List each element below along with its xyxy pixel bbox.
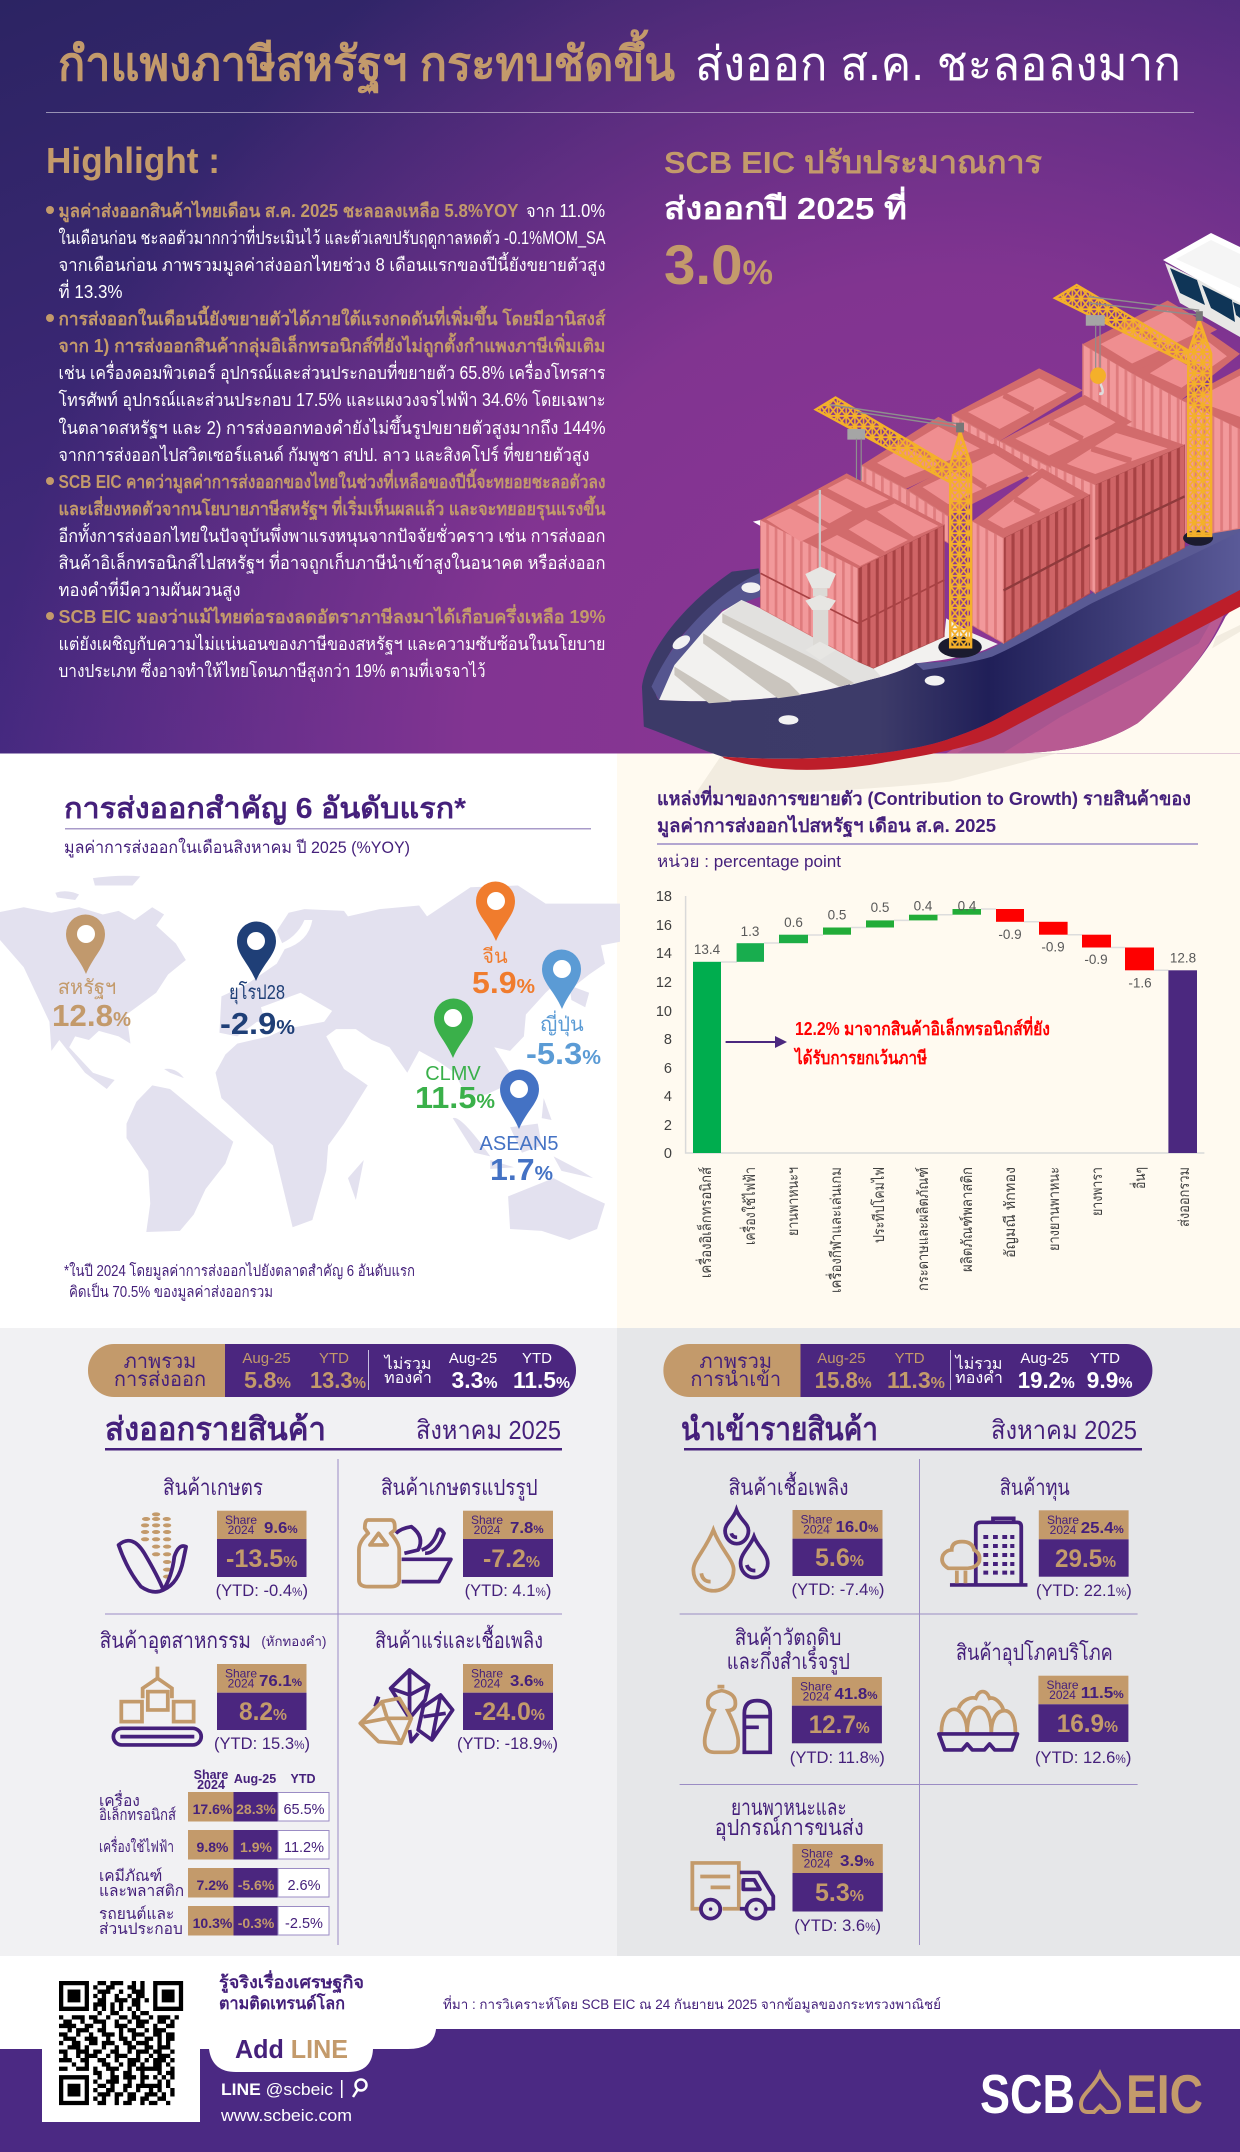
value labels: 0.5	[828, 908, 846, 922]
value labels: 0.6	[784, 915, 803, 930]
icon: truck	[692, 1863, 773, 1919]
export summary pill: 13.3%	[310, 1367, 366, 1393]
pin: China	[472, 882, 535, 1000]
bullet 3: SCB EIC คาดว่ามูลค่าการส่งออกของไทยในช่วงที่เหลือของปีนี้จะทยอยชะลอตัวลง	[58, 468, 606, 494]
row: chemicals: เคมีภัณฑ์	[99, 1867, 162, 1885]
import heading: สิงหาคม 2025	[991, 1415, 1137, 1445]
bullet 2: จากการส่งออกไปสวิตเซอร์แลนด์ กัมพูชา สปป. ลาว และสิงคโปร์ ที่ขยายตัวสูง	[58, 442, 590, 466]
back crane	[1055, 285, 1213, 546]
cell: raw materials: สินค้าวัตถุดิบ	[735, 1625, 841, 1651]
cream corner below hull	[1023, 600, 1240, 753]
arrow	[726, 1036, 787, 1048]
ytd: (YTD: -18.9%)	[457, 1734, 558, 1753]
share box: 76.1%	[259, 1673, 302, 1690]
value labels: 13.4	[694, 942, 721, 957]
SCB EIC logo: EIC	[1126, 2063, 1203, 2125]
industrial breakdown table: 2024	[197, 1778, 225, 1792]
signal mast	[805, 490, 836, 660]
bullet 3: ทองคำที่มีความผันผวนสูง	[58, 577, 240, 601]
pin: CLMV	[415, 998, 495, 1115]
category labels: เครื่องกีฬาและเล่นเกม	[825, 1167, 845, 1293]
share box: 7.8%	[510, 1520, 544, 1537]
y axis labels	[656, 889, 672, 1162]
share box: 2024	[1049, 1688, 1076, 1702]
pin: China: จีน	[482, 946, 508, 968]
import summary pill: YTD	[895, 1350, 925, 1367]
share box: Share	[225, 1666, 257, 1680]
LINE promo: Add LINE	[235, 2034, 348, 2064]
y axis labels: 10	[656, 1004, 672, 1020]
row: electronics	[99, 1790, 329, 1824]
cell: industrial: สินค้าอุตสาหกรรม	[100, 1628, 251, 1654]
bullet 1	[46, 200, 606, 302]
value labels: -1.6	[1128, 976, 1152, 990]
bullet 1: จากเดือนก่อน ภาพรวมมูลค่าส่งออกไทยช่วง 8 เดือนแรกของปีนี้ยังขยายตัวสูง	[58, 252, 606, 276]
bullet 1: ที่ 13.3%	[58, 279, 122, 302]
row: appliances: 9.8%	[197, 1839, 229, 1855]
bow inner side	[651, 573, 761, 700]
row: chemicals: 7.2%	[197, 1877, 229, 1893]
bullet 2: โทรศัพท์ อุปกรณ์และส่วนประกอบ 17.5% และแผงวงจรไฟฟ้า 34.6% โดยเฉพาะ	[58, 389, 606, 411]
world map	[0, 876, 620, 1240]
y axis labels: 12	[656, 975, 672, 991]
bars	[693, 909, 1197, 1153]
export summary pill: 3.3%	[452, 1367, 498, 1393]
cell: fuel imports: สินค้าเชื้อเพลิง	[728, 1472, 848, 1500]
title	[58, 29, 1181, 95]
industrial breakdown table: YTD	[290, 1772, 316, 1786]
y axis labels: 8	[664, 1032, 672, 1048]
share box: Share	[1047, 1513, 1079, 1527]
value labels: 0.4	[958, 898, 977, 914]
import summary pill	[663, 1344, 1152, 1397]
value labels: -0.9	[1041, 940, 1065, 954]
cell: capital goods: สินค้าทุน	[1000, 1475, 1070, 1501]
share box: -24.0%	[474, 1698, 545, 1726]
import heading: นำเข้ารายสินค้า	[681, 1411, 878, 1447]
value labels: -0.9	[1084, 952, 1108, 967]
export heading: ส่งออกรายสินค้า	[105, 1411, 326, 1447]
export summary pill: 11.5%	[513, 1367, 570, 1393]
hero background	[0, 0, 1240, 754]
hull reflection	[946, 607, 1227, 753]
icon: egg tray	[939, 1692, 1017, 1750]
LINE promo: รู้จริงเรื่องเศรษฐกิจ	[219, 1970, 364, 1994]
bullet 2: ในตลาดสหรัฐฯ และ 2) การส่งออกทองคำยังไม่ขึ้นรูปขยายตัวสูงมากถึง 144%	[58, 415, 606, 439]
bullet 3: สินค้าอิเล็กทรอนิกส์ไปสหรัฐฯ ที่อาจถูกเก็บภาษีนำเข้าสูงในอนาคต หรือส่งออก	[58, 550, 606, 574]
y axis labels: 14	[656, 946, 672, 962]
export summary pill: ภาพรวม	[124, 1351, 196, 1373]
footnote	[64, 1262, 415, 1302]
icon: shakers	[705, 1687, 770, 1752]
share box	[792, 1510, 882, 1576]
icon: building and tree	[942, 1518, 1027, 1585]
share box: Share	[471, 1666, 503, 1680]
category labels: ยานพาหนะฯ	[785, 1167, 802, 1236]
share box: 29.5%	[1055, 1545, 1116, 1573]
pin: USA	[52, 915, 131, 1033]
share box: 2024	[474, 1676, 501, 1690]
ytd: (YTD: 11.8%)	[790, 1748, 885, 1767]
panel backgrounds: export and import	[0, 1328, 1240, 1956]
share box: 8.2%	[239, 1698, 287, 1726]
bullet 4: SCB EIC มองว่าแม้ไทยต่อรองลดอัตราภาษีลงมาได้เกือบครึ่งเหลือ 19%	[58, 604, 606, 627]
icon: bottle and fruit bowl	[359, 1520, 451, 1587]
share box: 2024	[228, 1676, 255, 1690]
forecast callout: ส่งออกปี 2025 ที่	[664, 186, 907, 226]
pin: EU	[220, 922, 295, 1041]
row: electronics: 65.5%	[283, 1802, 325, 1818]
pin: China: 5.9%	[472, 965, 535, 1000]
chart callout	[793, 1016, 1050, 1068]
export summary pill: YTD	[522, 1350, 552, 1367]
highlight text block	[46, 200, 606, 682]
chart callout: ได้รับการยกเว้นภาษี	[793, 1047, 927, 1068]
row: electronics: อิเล็กทรอนิกส์	[99, 1805, 176, 1824]
share box: 41.8%	[834, 1686, 878, 1703]
share box: 2024	[1050, 1523, 1077, 1537]
y axis labels: 16	[656, 918, 672, 934]
share box: Share	[801, 1846, 833, 1860]
hull	[642, 520, 1240, 759]
pin: Japan: -5.3%	[526, 1036, 601, 1071]
row: chemicals: และพลาสติก	[99, 1883, 184, 1900]
bullet 1: ในเดือนก่อน ชะลอตัวมากกว่าที่ประเมินไว้ และตัวเลขปรับฤดูกาลหดตัว -0.1%MOM_SA	[58, 225, 606, 249]
value labels: 1.3	[741, 924, 759, 939]
category labels	[695, 1167, 1193, 1293]
row: autos: -2.5%	[285, 1916, 323, 1932]
footnote: คิดเป็น 70.5% ของมูลค่าส่งออกรวม	[69, 1282, 273, 1302]
category labels: เครื่องใช้ไฟฟ้า	[739, 1167, 759, 1245]
cell: vehicles: อุปกรณ์การขนส่ง	[715, 1815, 864, 1841]
share box: 5.6%	[815, 1544, 864, 1572]
panel backgrounds: map and chart	[0, 754, 1240, 1328]
import summary pill: 19.2%	[1018, 1367, 1075, 1393]
cell: consumer goods	[939, 1640, 1131, 1767]
share box	[792, 1844, 883, 1912]
bullet 3: และเสี่ยงหดตัวจากนโยบายภาษีสหรัฐฯ ที่เริ่มเห็นผลแล้ว และจะทยอยรุนแรงขึ้น	[58, 495, 606, 521]
share box: 2024	[474, 1523, 501, 1537]
share box: Share	[1046, 1678, 1079, 1692]
import summary pill: การนำเข้า	[690, 1369, 781, 1391]
front crane	[816, 397, 982, 658]
cell: agriculture	[119, 1475, 308, 1600]
share box: 2024	[803, 1690, 830, 1704]
import summary pill: 15.8%	[815, 1367, 872, 1393]
bullet 1: จาก 11.0%	[526, 201, 605, 221]
share box: 3.6%	[510, 1673, 544, 1690]
value labels: -0.9	[998, 927, 1022, 942]
ytd: (YTD: 15.3%)	[214, 1734, 310, 1753]
cell: capital goods	[942, 1475, 1132, 1600]
pin: CLMV: CLMV	[425, 1063, 481, 1085]
pin: USA: 12.8%	[52, 998, 131, 1033]
bullet 3	[46, 468, 606, 601]
icon: drops	[693, 1510, 768, 1591]
row: electronics: 28.3%	[236, 1801, 276, 1817]
pin: EU: -2.9%	[220, 1006, 295, 1041]
value labels: 0.4	[914, 898, 933, 914]
icon: corn	[119, 1512, 186, 1592]
icon: conveyor	[113, 1667, 201, 1745]
hull shadow on cream	[694, 753, 1057, 797]
value labels: 0.5	[871, 900, 889, 915]
containers: front stack	[753, 473, 944, 668]
title: ส่งออก ส.ค. ชะลอลงมาก	[695, 37, 1181, 90]
row: appliances: 11.2%	[284, 1840, 324, 1856]
title: กำแพงภาษีสหรัฐฯ กระทบชัดขึ้น	[58, 29, 675, 95]
export heading: สิงหาคม 2025	[416, 1415, 561, 1445]
bullet 2: การส่งออกในเดือนนี้ยังขยายตัวได้ภายใต้แรงกดดันที่เพิ่มขึ้น โดยมีอานิสงส์	[58, 305, 606, 329]
share box: 16.0%	[836, 1519, 879, 1536]
LINE promo: LINE @scbeic	[221, 2080, 334, 2099]
share box: 2024	[804, 1856, 831, 1870]
category labels: เครื่องอิเล็กทรอนิกส์	[695, 1167, 715, 1278]
share box	[463, 1511, 553, 1577]
category labels: ส่งออกรวม	[1176, 1167, 1193, 1227]
row: autos: 10.3%	[193, 1915, 233, 1931]
SCB EIC logo	[980, 2063, 1203, 2125]
export summary pill: Aug-25	[449, 1350, 497, 1367]
bullet 1: มูลค่าส่งออกสินค้าไทยเดือน ส.ค. 2025 ชะลอลงเหลือ 5.8%YOY	[58, 200, 518, 223]
ytd: (YTD: -0.4%)	[216, 1581, 308, 1600]
import summary pill: Aug-25	[1020, 1350, 1069, 1367]
row: chemicals: 2.6%	[287, 1878, 321, 1894]
row: electronics: 17.6%	[193, 1801, 233, 1817]
cell: consumer goods: สินค้าอุปโภคบริโภค	[956, 1640, 1113, 1666]
share box: 5.3%	[815, 1879, 864, 1907]
icon: crystals	[360, 1670, 453, 1743]
pin: ASEAN5: ASEAN5	[480, 1133, 558, 1155]
cell: agriculture: สินค้าเกษตร	[163, 1475, 263, 1500]
share box: -13.5%	[226, 1545, 298, 1573]
import heading	[681, 1411, 1142, 1450]
cell: minerals and fuel: สินค้าแร่และเชื้อเพลิง	[375, 1625, 543, 1653]
forecast callout: SCB EIC ปรับประมาณการ	[664, 145, 1042, 180]
y axis labels: 6	[664, 1061, 672, 1077]
pin: ASEAN5: 1.7%	[490, 1152, 553, 1187]
import summary pill: YTD	[1090, 1350, 1120, 1367]
share box	[463, 1664, 553, 1730]
forecast callout	[664, 145, 1042, 296]
cell: industrial	[100, 1628, 326, 1753]
import summary pill: ทองคำ	[955, 1370, 1003, 1387]
ytd: (YTD: 3.6%)	[794, 1916, 881, 1935]
LINE promo	[219, 1970, 366, 2125]
bullet 2: จาก 1) การส่งออกสินค้ากลุ่มอิเล็กทรอนิกส์ที่ยังไม่ถูกตั้งกำแพงภาษีเพิ่มเติม	[58, 332, 606, 358]
bullet 2	[46, 305, 606, 466]
export heading	[105, 1411, 562, 1450]
row: autos: ส่วนประกอบ	[99, 1921, 183, 1938]
category labels: ประทีปโคมไฟ	[870, 1167, 888, 1243]
export summary pill: Aug-25	[242, 1350, 291, 1367]
category labels: ผลิตภัณฑ์พลาสติก	[959, 1167, 976, 1272]
export summary pill: การส่งออก	[114, 1369, 206, 1391]
row: appliances	[99, 1830, 329, 1860]
ytd: (YTD: 12.6%)	[1035, 1748, 1131, 1767]
share box: 9.6%	[264, 1520, 298, 1537]
share box: 25.4%	[1081, 1520, 1124, 1537]
row: appliances: เครื่องใช้ไฟฟ้า	[99, 1836, 174, 1856]
import summary pill: ไม่รวม	[954, 1354, 1002, 1373]
share box	[1039, 1510, 1129, 1577]
highlight heading: Highlight :	[46, 140, 220, 181]
chart heading: หน่วย : percentage point	[657, 852, 841, 871]
pin: Japan: ญี่ปุ่น	[540, 1010, 584, 1037]
category labels: กระดาษและผลิตภัณฑ์	[915, 1167, 932, 1291]
chart heading: มูลค่าการส่งออกไปสหรัฐฯ เดือน ส.ค. 2025	[657, 814, 996, 838]
bullet 3: อีกทั้งการส่งออกไทยในปัจจุบันพึ่งพาแรงหนุนจากปัจจัยชั่วคราว เช่น การส่งออก	[58, 523, 606, 547]
hull light band	[916, 520, 1240, 670]
y axis labels: 4	[664, 1089, 672, 1105]
share box	[1038, 1676, 1128, 1742]
pin: ASEAN5	[480, 1070, 558, 1187]
source note: ที่มา : การวิเคราะห์โดย SCB EIC ณ 24 กันยายน 2025 จากข้อมูลของกระทรวงพาณิชย์	[443, 1995, 941, 2013]
import summary pill: 9.9%	[1087, 1367, 1133, 1393]
import summary pill: Aug-25	[817, 1350, 866, 1367]
cell: processed agriculture	[359, 1475, 553, 1600]
section heading: top 6 markets: การส่งออกสำคัญ 6 อันดับแรก*	[64, 793, 467, 826]
portholes	[670, 582, 945, 725]
export summary pill: YTD	[319, 1350, 349, 1367]
LINE promo: www.scbeic.com	[220, 2106, 352, 2125]
bullet 4: บางประเภท ซึ่งอาจทำให้ไทยโดนภาษีสูงกว่า 19% ตามที่เจรจาไว้	[58, 658, 486, 682]
share box: Share	[800, 1680, 832, 1694]
share box: 2024	[228, 1523, 255, 1537]
industrial breakdown table: Share	[194, 1768, 228, 1782]
pin: CLMV: 11.5%	[415, 1080, 495, 1115]
share box	[792, 1677, 882, 1743]
cell: raw materials	[705, 1625, 885, 1767]
share box: Share	[225, 1513, 257, 1527]
share box	[217, 1511, 306, 1577]
ytd: (YTD: 22.1%)	[1036, 1581, 1132, 1600]
hull red stripe	[722, 590, 1240, 770]
chart heading: แหล่งที่มาของการขยายตัว (Contribution to Growth) รายสินค้าของ	[657, 785, 1191, 809]
bullet 4	[46, 604, 606, 682]
deck	[659, 600, 998, 701]
section heading: top 6 markets	[64, 793, 591, 858]
row: chemicals	[99, 1867, 329, 1900]
ytd: (YTD: -7.4%)	[792, 1580, 884, 1599]
y axis labels: 18	[656, 889, 672, 905]
share box: 2024	[803, 1522, 830, 1536]
footer background	[0, 1956, 1240, 2152]
hull and deck	[642, 520, 1240, 797]
bullet 4: แต่ยังเผชิญกับความไม่แน่นอนของภาษีของสหรัฐฯ และความซับซ้อนในนโยบาย	[58, 633, 606, 655]
y axis labels: 2	[664, 1118, 672, 1134]
ytd: (YTD: 4.1%)	[465, 1581, 551, 1600]
icon: search	[353, 2080, 366, 2097]
pin: Japan	[526, 950, 601, 1071]
import summary pill: 11.3%	[887, 1367, 945, 1393]
category labels: อัญมณี หักทอง	[1002, 1167, 1019, 1258]
category labels: ยางพารา	[1089, 1167, 1106, 1216]
export summary pill: ไม่รวม	[383, 1354, 431, 1373]
value labels: 12.8	[1170, 950, 1196, 966]
cell: vehicles	[692, 1795, 883, 1935]
share box	[217, 1664, 306, 1730]
section heading: top 6 markets: มูลค่าการส่งออกในเดือนสิงหาคม ปี 2025 (%YOY)	[64, 837, 410, 858]
share box: 12.7%	[809, 1711, 870, 1739]
row: appliances: 1.9%	[240, 1839, 273, 1855]
row: autos: รถยนต์และ	[99, 1905, 174, 1923]
chart heading	[657, 785, 1198, 871]
forecast callout: 3.0%	[664, 233, 773, 296]
share box: Share	[471, 1513, 503, 1527]
bullet 2: เช่น เครื่องคอมพิวเตอร์ อุปกรณ์และส่วนประกอบที่ขยายตัว 65.8% เครื่องโทรสาร	[58, 360, 606, 384]
category labels: อื่นๆ	[1129, 1167, 1149, 1189]
export summary pill	[88, 1344, 576, 1397]
industrial breakdown table	[99, 1768, 329, 1938]
import summary pill: ภาพรวม	[699, 1351, 772, 1373]
waterfall chart	[656, 889, 1204, 1293]
illustration: container ship	[642, 233, 1240, 797]
cell: industrial: (หักทองคำ)	[261, 1634, 326, 1649]
share box: Share	[800, 1512, 833, 1526]
row: autos: -0.3%	[238, 1915, 275, 1931]
chart callout: 12.2% มาจากสินค้าอิเล็กทรอนิกส์ที่ยัง	[795, 1016, 1050, 1039]
value labels	[694, 898, 1196, 990]
footnote: *ในปี 2024 โดยมูลค่าการส่งออกไปยังตลาดสำคัญ 6 อันดับแรก	[64, 1262, 415, 1281]
pin: USA: สหรัฐฯ	[58, 977, 116, 999]
share box: -7.2%	[483, 1545, 540, 1573]
share box: 16.9%	[1057, 1710, 1118, 1738]
row: autos	[99, 1905, 329, 1938]
category labels: ยางยานพาหนะ	[1046, 1167, 1063, 1251]
ship bridge	[1163, 233, 1240, 337]
pin: EU: ยุโรป28	[229, 981, 285, 1005]
export summary pill: 5.8%	[244, 1367, 291, 1393]
share box: 11.5%	[1081, 1685, 1124, 1702]
containers: back stacks	[861, 301, 1240, 643]
y axis labels: 0	[664, 1146, 672, 1162]
cell: processed agriculture: สินค้าเกษตรแปรรูป	[381, 1475, 538, 1501]
cell: raw materials: และกึ่งสำเร็จรูป	[727, 1646, 850, 1675]
QR code	[42, 1960, 200, 2122]
industrial breakdown table: Aug-25	[234, 1772, 276, 1786]
row: electronics: เครื่อง	[99, 1790, 140, 1810]
share box: 3.9%	[840, 1853, 874, 1870]
cell: vehicles: ยานพาหนะและ	[731, 1795, 847, 1820]
row: chemicals: -5.6%	[238, 1877, 275, 1893]
LINE promo: ตามติดเทรนด์โลก	[219, 1993, 345, 2013]
SCB EIC logo: SCB	[980, 2063, 1075, 2125]
cell: minerals and fuel	[360, 1625, 558, 1753]
export summary pill: ทองคำ	[384, 1370, 432, 1387]
cell: fuel imports	[693, 1472, 884, 1599]
